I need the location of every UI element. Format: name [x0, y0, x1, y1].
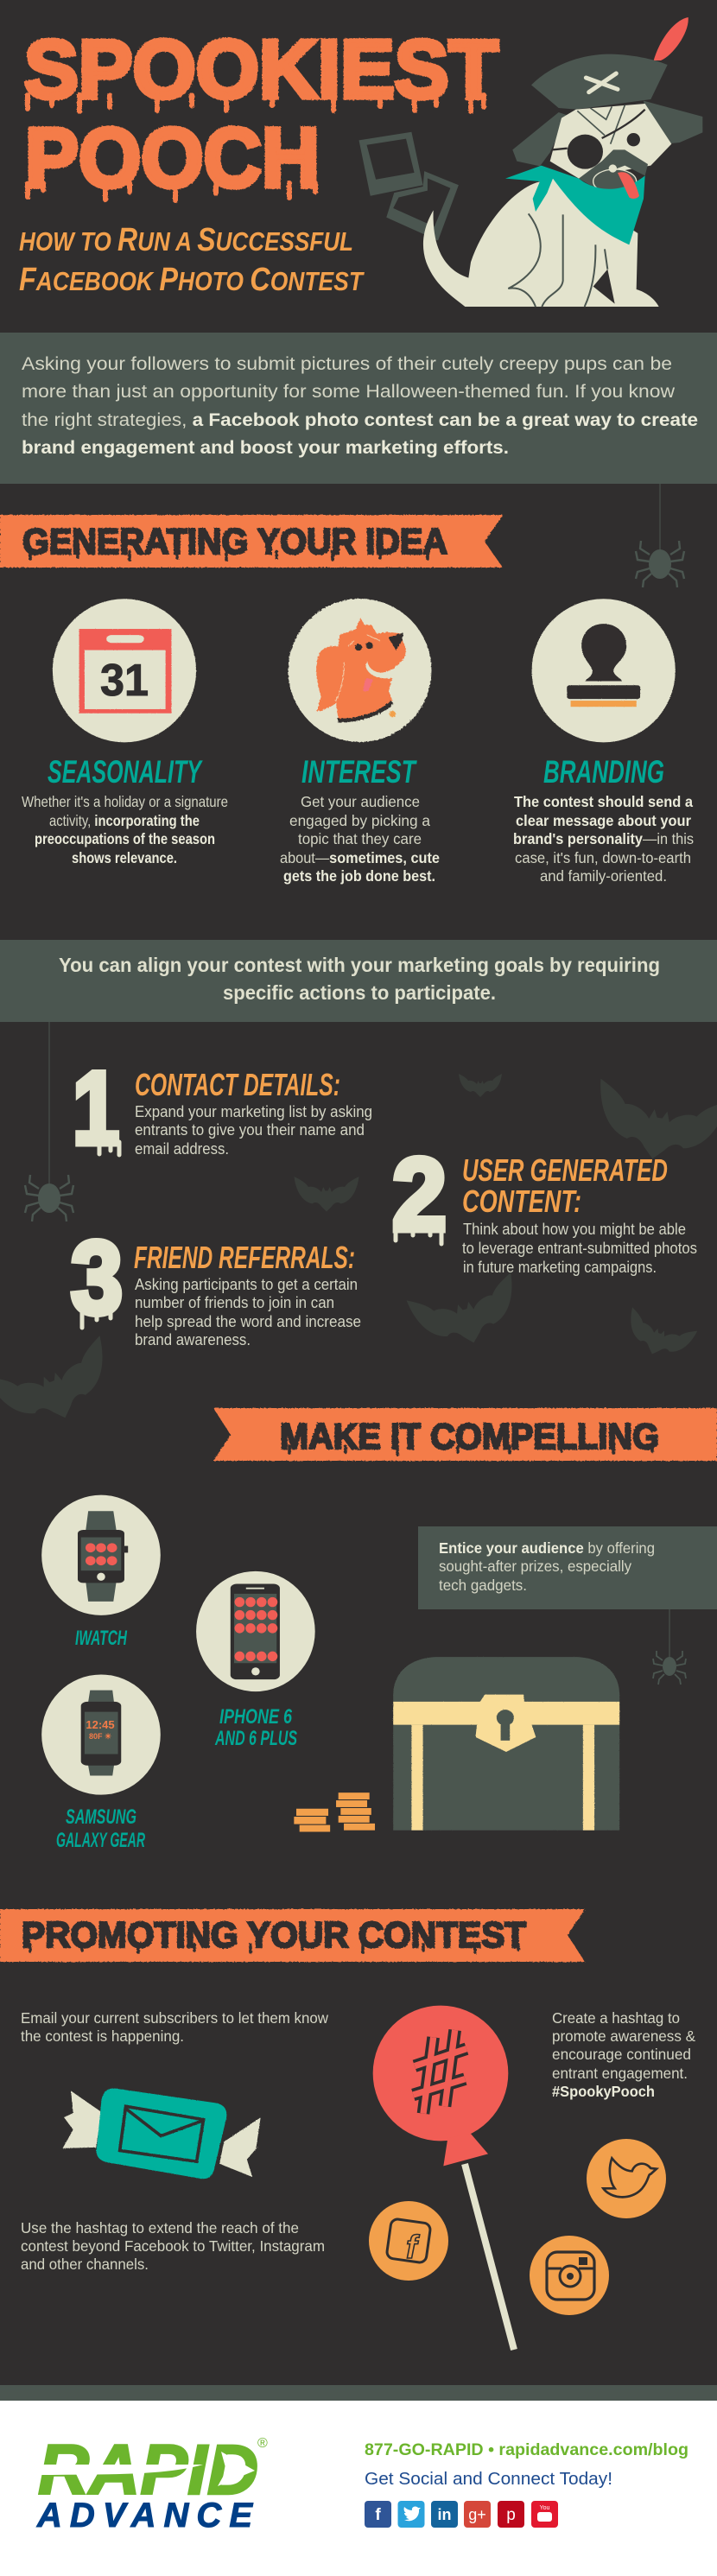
gadget: iWatch: [41, 1495, 161, 1650]
text: create a hashtag: promote awareness &: [552, 2027, 695, 2045]
icon: calendar: 31: [100, 656, 149, 706]
icon: linkedin button: [431, 2501, 458, 2528]
icon: pirate dog: [423, 17, 702, 307]
gadget: iPhone: [196, 1571, 315, 1750]
heading: user generated content: [462, 1152, 668, 1219]
banner: Generating Your Idea: [0, 515, 503, 568]
label: iPhone: AND 6 PLUS: [214, 1727, 297, 1750]
panel: intro band: [0, 333, 717, 484]
icon: photo frames: [359, 132, 459, 240]
text: extend the reach: and other channels.: [21, 2256, 149, 2273]
icon: calendar: [53, 599, 196, 742]
callout text: [439, 1539, 655, 1594]
numeral 3: 3: [71, 1220, 123, 1336]
logo: Rapid Advance: RAPID: [38, 2431, 258, 2509]
text: branding: case, it's fun, down-to-earth: [515, 849, 691, 866]
text: friend referrals: number of friends to join in can: [135, 1293, 334, 1311]
banner: Generating Your Idea: GENERATING YOUR IDEA: [22, 521, 447, 562]
text: interest: Get your audience: [301, 793, 420, 810]
text: user generated content: Think about how you might be able: [463, 1220, 686, 1238]
label: iPhone: [214, 1705, 297, 1750]
label: iPhone: IPHONE 6: [219, 1705, 292, 1729]
icon: spider: [636, 484, 684, 587]
icon: linkedin button: in: [437, 2506, 451, 2523]
column: branding: [513, 599, 694, 885]
icon: google plus button: [464, 2501, 491, 2528]
banner: Promoting Your Contest: [0, 1909, 585, 1962]
title: Spookiest Pooch: [24, 23, 498, 205]
banner: Make It Compelling: MAKE IT COMPELLING: [280, 1416, 659, 1456]
text: friend referrals: [135, 1275, 361, 1348]
banner: Make It Compelling: [213, 1408, 717, 1461]
text: create a hashtag: entrant engagement.: [552, 2065, 688, 2082]
intro paragraph: Asking your followers to submit pictures of their cutely creepy pups can be: [22, 353, 672, 374]
text: extend the reach: Use the hashtag to extend the reach of the: [21, 2219, 299, 2237]
text: branding: clear message about your: [516, 812, 691, 829]
step 3: friend referrals: [71, 1220, 361, 1348]
icon: Samsung watch: 80F ☀: [89, 1732, 111, 1741]
label: Samsung Galaxy Gear: GALAXY GEAR: [56, 1829, 145, 1852]
icon: treasure chest: [393, 1657, 619, 1830]
subtitle: [19, 222, 365, 298]
heading: user generated content: CONTENT:: [462, 1183, 581, 1219]
text: interest: [280, 793, 440, 885]
text: seasonality: preoccupations of the season: [35, 830, 215, 847]
text: seasonality: activity, incorporating the: [49, 812, 200, 829]
label: Samsung Galaxy Gear: [56, 1805, 145, 1852]
text: interest: engaged by picking a: [289, 812, 430, 829]
subtitle: HOW TO RUN A SUCCESSFUL: [19, 222, 353, 258]
title: Spookiest Pooch: SPOOKIEST: [24, 23, 498, 116]
social prompt: Get Social and Connect Today!: [365, 2470, 612, 2489]
label: Samsung Galaxy Gear: SAMSUNG: [66, 1805, 136, 1829]
icon: Samsung watch: 12:45: [86, 1718, 115, 1731]
text: friend referrals: brand awareness.: [135, 1330, 251, 1348]
banner: Promoting Your Contest: PROMOTING YOUR CONTEST: [22, 1914, 526, 1955]
callout text: sought-after prizes, especially: [439, 1558, 631, 1575]
text: extend the reach: contest beyond Facebook to Twitter, Instagram: [21, 2237, 325, 2255]
text: seasonality: Whether it's a holiday or a signature: [22, 793, 228, 810]
text: interest: topic that they care: [298, 830, 422, 847]
text: branding: [513, 793, 694, 885]
icon: twitter button: [397, 2501, 425, 2528]
icon: facebook button: [365, 2501, 391, 2528]
logo: Rapid Advance: ®: [257, 2436, 268, 2451]
text: user generated content: to leverage entrant-submitted photos: [462, 1239, 697, 1257]
icon: iPhone: [196, 1571, 315, 1691]
icon: instagram: [530, 2236, 609, 2315]
text: create a hashtag: encourage continued: [552, 2046, 691, 2063]
divider band: [0, 2385, 717, 2401]
intro paragraph: the right strategies, a Facebook photo contest can be a great way to create: [22, 409, 698, 430]
icon: spider: [25, 1019, 73, 1221]
social icons: [365, 2501, 558, 2528]
text: user generated content: [462, 1220, 697, 1276]
logo: Rapid Advance: ADVANCE: [36, 2497, 253, 2535]
text: contact details: email address.: [135, 1139, 229, 1158]
text: create a hashtag: [552, 2009, 695, 2100]
icon: email candy: [63, 2088, 261, 2179]
goals text: [59, 954, 660, 1004]
text: branding: brand's personality—in this: [513, 830, 694, 847]
icon: Samsung watch: [41, 1674, 161, 1795]
numeral 2: 2: [392, 1137, 447, 1253]
numeral 1: 1: [73, 1050, 119, 1166]
column: seasonality: [22, 599, 228, 866]
intro paragraph: more than just an opportunity for some Halloween-themed fun. If you know: [22, 381, 675, 402]
title: Spookiest Pooch: POOCH: [25, 111, 320, 205]
goals text: specific actions to participate.: [223, 981, 496, 1004]
text: create a hashtag: Create a hashtag to: [552, 2009, 680, 2027]
callout text: Entice your audience by offering: [439, 1539, 655, 1557]
icon: pinterest button: p: [506, 2506, 516, 2524]
column: interest: [280, 599, 440, 885]
goals text: You can align your contest with your marketing goals by requiring: [59, 954, 660, 976]
icon: twitter: [587, 2139, 666, 2218]
gadget: Samsung Galaxy Gear: [41, 1674, 161, 1852]
intro paragraph: brand engagement and boost your marketing efforts.: [22, 437, 509, 458]
text: interest: about—sometimes, cute: [280, 849, 440, 866]
contact line: 877-GO-RAPID • rapidadvance.com/blog: [365, 2440, 688, 2459]
heading: interest: INTEREST: [301, 754, 417, 790]
text: user generated content: in future marketing campaigns.: [463, 1258, 657, 1276]
step 2: user generated content: [392, 1137, 697, 1276]
text: extend the reach: [21, 2219, 325, 2273]
text: contact details: [135, 1102, 372, 1158]
text: email subscribers: the contest is happening.: [21, 2027, 184, 2045]
subtitle: FACEBOOK PHOTO CONTEST: [19, 262, 365, 298]
step 1: contact details: [73, 1050, 372, 1166]
text: friend referrals: Asking participants to get a certain: [135, 1275, 358, 1293]
text: branding: and family-oriented.: [540, 867, 667, 885]
heading: contact details: CONTACT DETAILS:: [135, 1067, 340, 1102]
icon: orange dog: [289, 599, 432, 742]
panel: entice callout: [418, 1526, 717, 1609]
icon: youtube button: You: [540, 2505, 550, 2511]
panel: footer: [0, 2401, 717, 2576]
text: contact details: Expand your marketing list by asking: [135, 1102, 372, 1120]
icon: youtube button: [531, 2501, 558, 2528]
text: contact details: entrants to give you their name and: [135, 1120, 365, 1139]
icon: facebook: [369, 2201, 448, 2281]
heading: friend referrals: FRIEND REFERRALS:: [134, 1240, 355, 1275]
icon: stamp: [532, 599, 676, 742]
text: email subscribers: [21, 2009, 328, 2045]
text: interest: gets the job done best.: [283, 867, 435, 885]
panel: goals band: [0, 940, 717, 1022]
icon: gold coins: [294, 1792, 375, 1832]
icon: spider: [653, 1609, 686, 1685]
icon: facebook: f: [406, 2230, 420, 2266]
text: email subscribers: Email your current subscribers to let them know: [21, 2009, 328, 2027]
text: create a hashtag: #SpookyPooch: [552, 2083, 655, 2100]
text: seasonality: [22, 793, 228, 866]
icon: iWatch: [41, 1495, 161, 1615]
callout text: tech gadgets.: [439, 1577, 527, 1594]
text: seasonality: shows relevance.: [72, 849, 177, 866]
heading: branding: BRANDING: [543, 754, 664, 790]
text: friend referrals: help spread the word and increase: [135, 1312, 361, 1330]
icon: google plus button: g+: [468, 2506, 486, 2523]
text: branding: The contest should send a: [514, 793, 693, 810]
intro paragraph: [22, 353, 698, 458]
label: iWatch: IWATCH: [75, 1627, 127, 1650]
background bats: [0, 1074, 717, 1438]
icon: pinterest button: [498, 2501, 524, 2528]
icon: facebook button: f: [375, 2506, 381, 2524]
icon: hashtag balloon: [373, 2006, 514, 2350]
heading: seasonality: SEASONALITY: [48, 754, 203, 790]
